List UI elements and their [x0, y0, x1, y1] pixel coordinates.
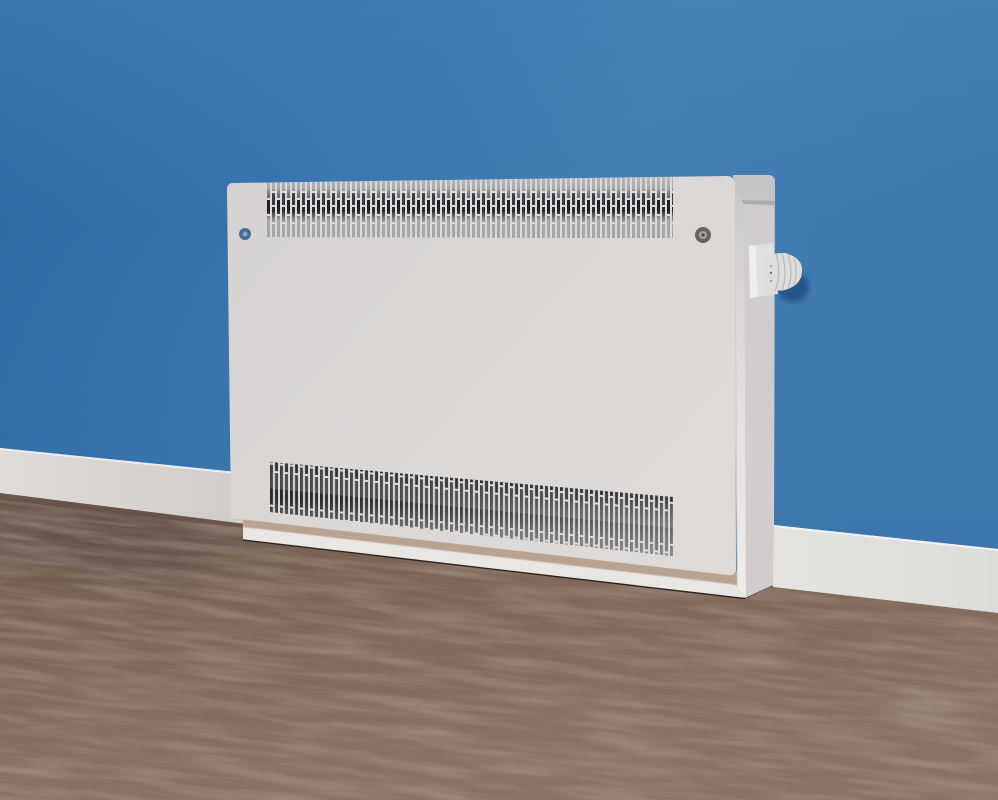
knob shadow: [777, 272, 809, 302]
left lock screw: [239, 228, 251, 240]
bottom grille: [270, 462, 673, 556]
white skirting board, right: [773, 525, 998, 613]
knob: [762, 253, 802, 292]
wooden floor: [0, 470, 998, 800]
right lock screw: [695, 227, 711, 243]
radiator cabinet: [227, 170, 775, 598]
top grille: [267, 177, 673, 238]
plinth: [243, 519, 748, 598]
plinth shadow band: [243, 519, 746, 586]
valve mounting block: [749, 243, 778, 298]
blue wall: [0, 0, 998, 640]
contact shadow on floor: [243, 540, 772, 598]
white skirting board, left: [0, 448, 246, 524]
front panel: [227, 176, 736, 575]
side panel: [733, 175, 775, 598]
thermostat valve: [749, 243, 809, 302]
